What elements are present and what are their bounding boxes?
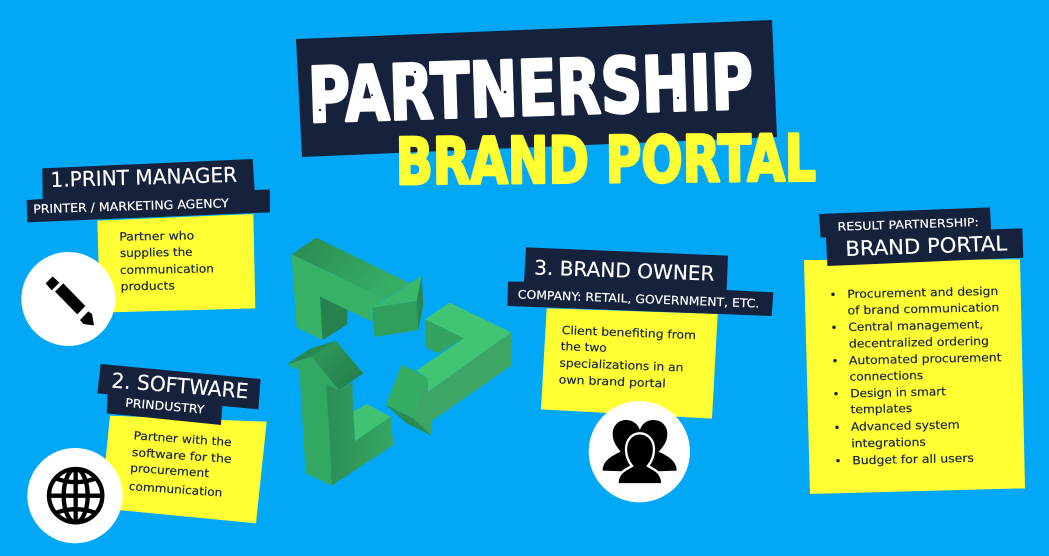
distressed texture bbox=[319, 69, 736, 111]
panel: software bbox=[27, 364, 267, 543]
heading: brand portal result: BRAND PORTAL bbox=[845, 231, 1008, 261]
list: brand portal benefits: Automated procurement bbox=[849, 350, 1002, 367]
icon: globe bbox=[27, 448, 123, 543]
heading: software: 2. SOFTWARE bbox=[111, 368, 249, 403]
list: brand portal benefits: of brand communication bbox=[847, 300, 999, 317]
description: print manager: products bbox=[120, 278, 175, 293]
description: software: communication bbox=[128, 479, 223, 500]
list: brand portal benefits: Budget for all users bbox=[852, 451, 974, 467]
description: software: procurement bbox=[130, 461, 210, 480]
list: brand portal benefits bbox=[831, 284, 1002, 467]
heading: print manager: 1.PRINT MANAGER bbox=[50, 163, 237, 192]
title block bbox=[296, 20, 816, 200]
subheading: company types: COMPANY: RETAIL, GOVERNMENT, ETC. bbox=[518, 287, 760, 311]
description: brand owner bbox=[559, 323, 696, 390]
description: brand owner: own brand portal bbox=[559, 372, 666, 390]
subheading: prindustry: PRINDUSTRY bbox=[125, 396, 206, 417]
arrow: bottom left bbox=[287, 341, 393, 486]
description: brand owner: the two bbox=[561, 339, 607, 355]
description: brand owner: Client benefiting from bbox=[562, 323, 696, 342]
list: brand portal benefits: Central management, bbox=[848, 317, 983, 334]
description: print manager: supplies the bbox=[120, 245, 193, 260]
list: brand portal benefits: Design in smart bbox=[850, 384, 947, 400]
subheading: printer or marketing agency: PRINTER / MARKETING AGENCY bbox=[33, 196, 230, 216]
heading: brand portal: BRAND PORTAL bbox=[395, 122, 816, 200]
arrow: top bbox=[292, 238, 423, 340]
panel: result partnership bbox=[804, 207, 1025, 494]
description: print manager: communication bbox=[120, 261, 214, 277]
heading: partnership: PARTNERSHIP bbox=[307, 37, 754, 140]
icon: pencil bbox=[21, 252, 115, 346]
heading: brand owner: 3. BRAND OWNER bbox=[534, 255, 715, 286]
description: print manager: Partner who bbox=[119, 228, 194, 244]
panel: brand owner bbox=[507, 247, 773, 502]
list: brand portal benefits: Procurement and design bbox=[847, 284, 998, 301]
description: software: Partner with the bbox=[133, 428, 232, 449]
icon: green triangular arrows bbox=[287, 238, 511, 486]
list: brand portal benefits: Advanced system bbox=[851, 417, 960, 434]
description: print manager bbox=[119, 228, 214, 293]
arrow: right bbox=[386, 303, 511, 436]
description: software: software for the bbox=[131, 445, 232, 466]
description: brand owner: specializations in an bbox=[559, 356, 684, 374]
list: brand portal benefits: integrations bbox=[851, 435, 926, 450]
list: brand portal benefits: connections bbox=[849, 368, 923, 384]
list: brand portal benefits: decentralized ordering bbox=[849, 334, 989, 351]
list: brand portal benefits: templates bbox=[850, 401, 912, 416]
description: software bbox=[128, 428, 232, 500]
panel: print manager bbox=[21, 159, 270, 346]
icon: people bbox=[589, 401, 690, 502]
subheading: result partnership: RESULT PARTNERSHIP: bbox=[837, 215, 979, 234]
